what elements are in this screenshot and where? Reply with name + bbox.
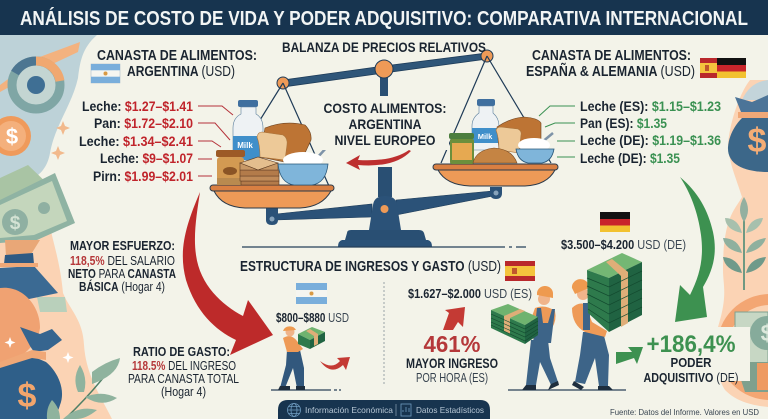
- flag: Spain: [505, 261, 535, 281]
- icon: coin and banknote right: [717, 294, 768, 400]
- worker: Spain medium: [491, 286, 626, 390]
- scale pillar and base: [338, 74, 432, 247]
- lower beam: [266, 187, 502, 230]
- jam jar: [216, 150, 245, 185]
- heading: Spain and Germany basket: CANASTA DE ALIMENTOS:: [532, 48, 691, 64]
- income heading: ESTRUCTURA DE INGRESOS Y GASTO (USD): [240, 259, 501, 275]
- Germany income: $3.500–$4.200 USD (DE): [561, 237, 686, 252]
- icon: money bag lower: $: [18, 377, 37, 415]
- Argentina price list: [79, 99, 193, 184]
- Argentina price list: Leche: $1.27–$1.41: [82, 99, 193, 114]
- bread loaf: [257, 123, 311, 162]
- Argentina price list: Leche: $9–$1.07: [100, 151, 193, 166]
- Spain and Germany price list: Leche (DE): $1.35: [580, 151, 680, 166]
- Spain and Germany price list: Leche (DE): $1.19–$1.36: [580, 133, 721, 148]
- stat: purchasing power: +186,4%: [646, 331, 736, 358]
- text: greater effort: BÁSICA (Hogar 4): [79, 279, 165, 294]
- Argentina income: $800–$880 USD: [276, 310, 349, 325]
- footer pill: Información Económica: [305, 405, 393, 415]
- rice bowl: [278, 147, 328, 185]
- flag: Argentina: [91, 64, 120, 83]
- right food group: [449, 99, 554, 164]
- Spain and Germany price list: Leche (ES): $1.15–$1.23: [580, 99, 721, 114]
- Spain income: $1.627–$2.000 USD (ES): [408, 286, 532, 301]
- Argentina price list: Leche: $1.34–$2.41: [79, 134, 193, 149]
- worker: Germany large: [572, 253, 642, 390]
- left decorative panel: [0, 35, 120, 419]
- arrow: central red: [346, 150, 411, 170]
- sandwich stack: [240, 157, 279, 185]
- left food group: [216, 100, 328, 185]
- Spain and Germany price list: Pan (ES): $1.35: [580, 116, 667, 131]
- footer pill: Datos Estadísticos: [416, 405, 484, 415]
- left pan: [210, 185, 334, 208]
- text: spending ratio: [128, 345, 239, 399]
- footer pill: [278, 400, 490, 419]
- bread loaf: [496, 117, 541, 153]
- icon: globe: [288, 404, 300, 416]
- icon: banknotes: [0, 165, 75, 243]
- icon: money bag right: [728, 95, 768, 172]
- heading: Spain and Germany basket: ESPAÑA & ALEMANIA (USD): [526, 62, 695, 80]
- icon: banknotes: $: [10, 213, 21, 234]
- balance scale: [210, 50, 558, 247]
- green jar: [449, 133, 474, 164]
- flag: Argentina small: [296, 283, 327, 304]
- rice bowl: [516, 133, 554, 163]
- heading: Argentina basket: [97, 48, 257, 80]
- worker: Argentina small: [271, 326, 341, 390]
- upper beam: [277, 50, 493, 89]
- icon: money bag right: $: [748, 122, 767, 160]
- text: spending ratio: PARA CANASTA TOTAL: [128, 372, 239, 386]
- source note: Fuente: Datos del Informe. Valores en USD: [610, 408, 759, 417]
- right pan: [433, 164, 558, 186]
- milk bottle: Milk: [237, 141, 253, 150]
- baguette: [473, 148, 517, 163]
- icon: dollar coin: $: [6, 124, 18, 149]
- stat: purchasing power: PODER: [670, 355, 712, 370]
- arrow: small red: [320, 357, 350, 370]
- right decorative panel: [716, 80, 768, 407]
- stat: 461 percent: [406, 331, 498, 385]
- arrow: small green: [616, 347, 643, 364]
- Argentina price list: Pirn: $1.99–$2.01: [93, 169, 193, 184]
- text: greater effort: MAYOR ESFUERZO:: [70, 239, 175, 253]
- arrow: big green down: [675, 177, 715, 322]
- text: greater effort: [68, 239, 176, 294]
- text: spending ratio: RATIO DE GASTO:: [133, 345, 230, 359]
- scale title: BALANZA DE PRECIOS RELATIVOS: [282, 39, 486, 55]
- text: spending ratio: (Hogar 4): [161, 385, 206, 399]
- right pan strings: [441, 56, 551, 163]
- stat: purchasing power: [644, 327, 750, 385]
- icon: leaves left: [47, 358, 120, 419]
- heading: Spain and Germany basket: [526, 48, 695, 80]
- heading: Argentina basket: CANASTA DE ALIMENTOS:: [97, 48, 257, 64]
- dotted separator: [383, 282, 385, 386]
- left pan strings: [219, 83, 329, 186]
- icon: document: [401, 404, 411, 416]
- milk bottle: Milk: [478, 132, 493, 141]
- icon: money bag upper: [0, 240, 67, 312]
- heading: Argentina basket: ARGENTINA (USD): [127, 64, 235, 80]
- Argentina price list: Pan: $1.72–$2.10: [94, 116, 193, 131]
- icon: peach bag: [0, 288, 40, 367]
- Argentina leader lines: [198, 106, 233, 176]
- flags: Spain and Germany: [700, 58, 746, 78]
- text: greater effort: NETO PARA CANASTA: [68, 267, 176, 281]
- central callout: NIVEL EUROPEO: [334, 132, 436, 148]
- stat: 461 percent: POR HORA (ES): [416, 371, 488, 385]
- icon: money bag lower: [0, 327, 62, 419]
- central callout: [322, 98, 449, 150]
- header bar: [0, 0, 768, 35]
- stat: 461 percent: MAYOR INGRESO: [406, 356, 498, 371]
- stat: 461 percent: 461%: [424, 331, 480, 357]
- stat: purchasing power: ADQUISITIVO (DE): [644, 370, 738, 385]
- Spain and Germany price list: [580, 99, 721, 166]
- text: spending ratio: 118.5% DEL INGRESO: [132, 359, 236, 373]
- central callout: COSTO ALIMENTOS:: [324, 100, 446, 116]
- arrow: small red up: [443, 307, 465, 330]
- icon: plant right: [723, 197, 766, 290]
- arrow: big red down: [183, 192, 273, 355]
- text: greater effort: 118,5% DEL SALARIO: [70, 254, 175, 268]
- icon: dollar coin: [0, 116, 31, 156]
- Spain and Germany leader lines: [539, 106, 575, 157]
- central callout: ARGENTINA: [348, 116, 422, 132]
- flag: Germany: [600, 212, 630, 232]
- divider: [242, 246, 526, 248]
